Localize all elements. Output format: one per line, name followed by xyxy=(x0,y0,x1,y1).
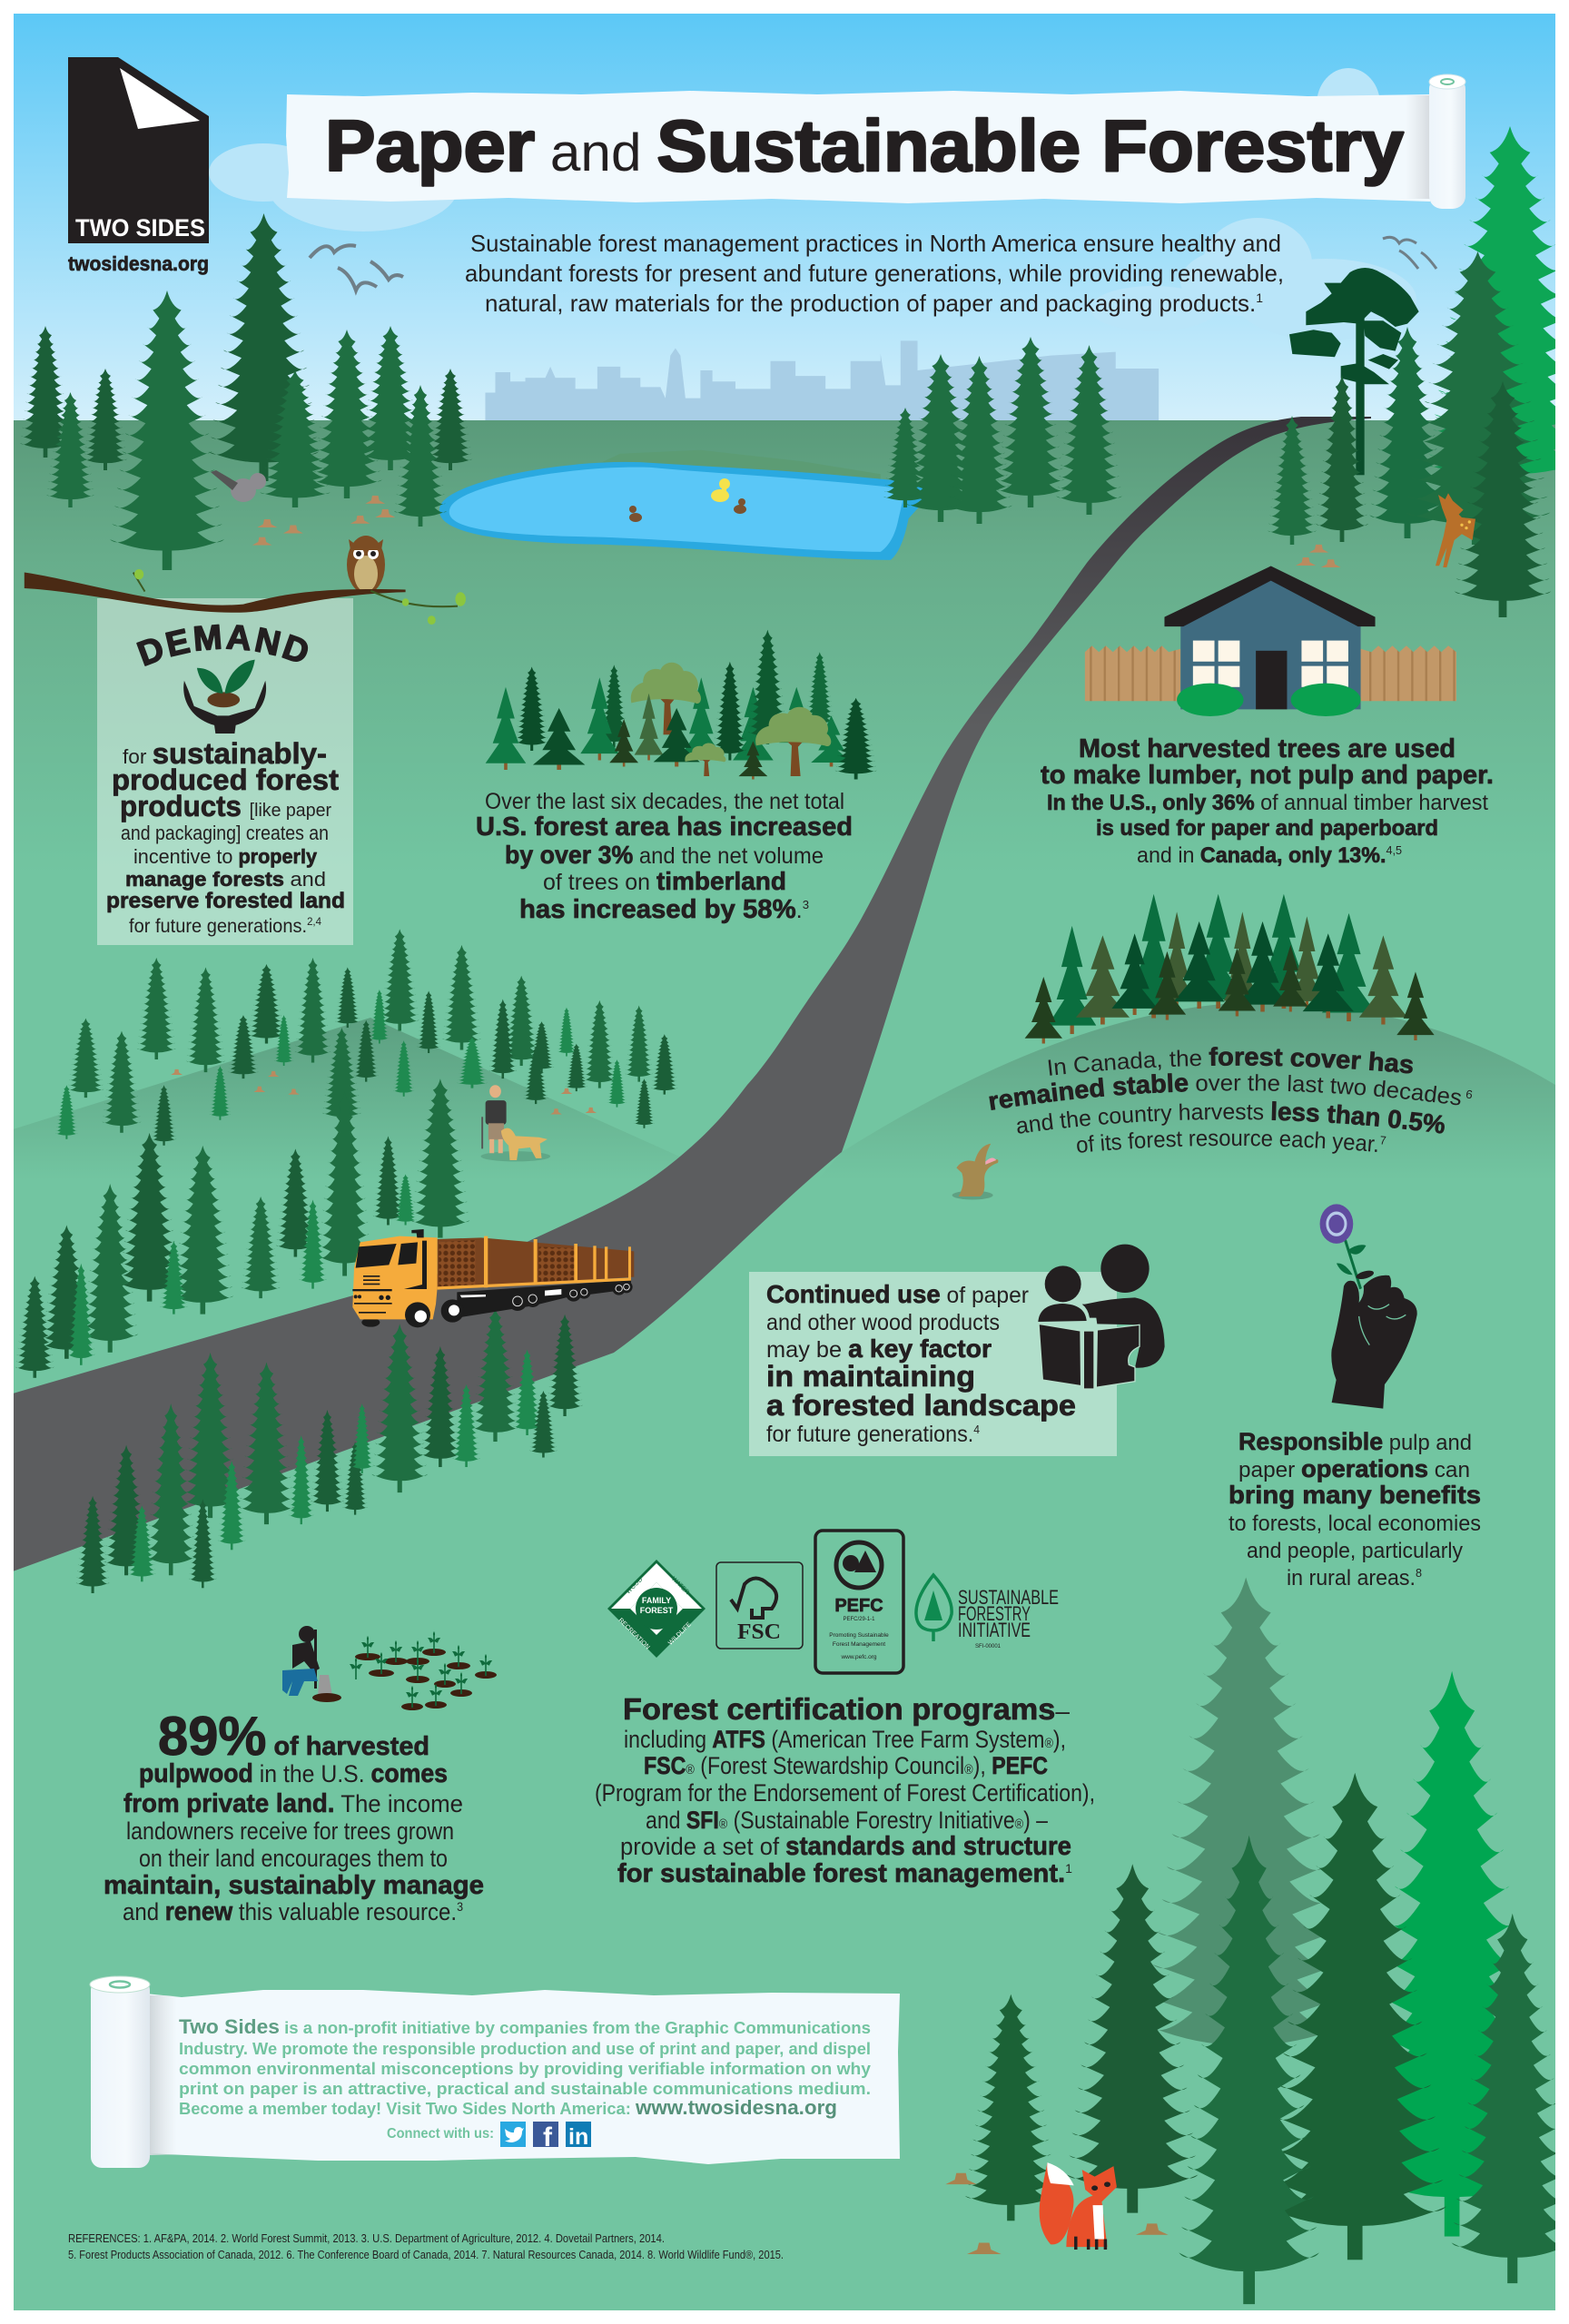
logo: FSC xyxy=(716,1562,803,1649)
curved text: Canada forest cover: In Canada, the forest cover has xyxy=(1048,1047,1413,1076)
text: about Two Sides: print on paper is an attractive, practical and sustainable communications medium. xyxy=(179,2080,871,2098)
text: responsible operations: in rural areas. xyxy=(1287,1566,1420,1590)
text: responsible operations: paper operations can xyxy=(1238,1455,1470,1482)
title: Paper and Sustainable Forestry xyxy=(325,105,1405,186)
text: forest area increase: Over the last six decades, the net total xyxy=(485,789,844,814)
text: forest area increase: 3 xyxy=(803,898,809,911)
curved text: Canada forest cover: of its forest resource each year. xyxy=(1077,1131,1377,1154)
text: responsible operations xyxy=(1229,1428,1481,1590)
icon: two people reading xyxy=(1038,1245,1165,1389)
logo: American Tree Farm System: FAMILY xyxy=(642,1596,671,1605)
text: about Two Sides: Industry. We promote the responsible production and use of print and paper, and dispel xyxy=(179,2040,871,2058)
text: forest certification programs: 1 xyxy=(1065,1861,1072,1876)
references: 5. Forest Products Association of Canada, 2012. 6. The Conference Board of Canada, 2014. 7. Natural Resources Canada, 2014. 8. World Wildlife Fund®, 2015. xyxy=(68,2249,784,2261)
bottom paper roll banner xyxy=(90,1976,900,2168)
demand text: preserve forested land xyxy=(106,889,345,913)
text: responsible operations: and people, particularly xyxy=(1247,1539,1463,1563)
logo: Two Sides: TWO SIDES xyxy=(75,214,205,241)
text: lumber use: 4,5 xyxy=(1386,843,1402,857)
logo: American Tree Farm System: WILDLIFE xyxy=(667,1621,693,1647)
social icons xyxy=(500,2122,591,2152)
logo: American Tree Farm System: RECREATION xyxy=(617,1617,651,1650)
intro text: 1 xyxy=(1256,290,1263,305)
logo: American Tree Farm System: FOREST xyxy=(640,1606,674,1615)
logo: Two Sides: twosidesna.org xyxy=(68,252,209,275)
forest: top right with pine xyxy=(1268,126,1569,617)
fox xyxy=(1040,2162,1117,2250)
demand text: manage forests and xyxy=(125,868,326,891)
logo: PEFC: www.pefc.org xyxy=(840,1654,877,1660)
text: forest certification programs: and SFI® (Sustainable Forestry Initiative®) – xyxy=(646,1807,1048,1834)
icon: linkedin: in xyxy=(568,2124,588,2150)
logo: Two Sides xyxy=(68,57,209,275)
text: 89% private land: maintain, sustainably manage xyxy=(104,1871,484,1900)
text: forest certification programs: provide a set of standards and structure xyxy=(620,1832,1071,1861)
demand arched heading: DEMAND xyxy=(136,625,309,666)
text: about Two Sides: Become a member today! Visit Two Sides North America: www.twosidesna.org xyxy=(179,2096,837,2119)
intro text: Sustainable forest management practices in North America ensure healthy and xyxy=(470,230,1281,257)
city skyline xyxy=(485,340,1159,420)
logo: FSC: FSC xyxy=(737,1620,781,1644)
logo: Sustainable Forestry Initiative: FORESTRY xyxy=(958,1602,1031,1625)
text: about Two Sides: common environmental misconceptions by providing verifiable information on why xyxy=(179,2060,871,2078)
curved text: Canada forest cover: remained stable over the last two decades xyxy=(989,1073,1461,1110)
icon: twitter xyxy=(500,2122,526,2147)
text: continued use: in maintaining xyxy=(766,1360,975,1393)
title banner with paper roll xyxy=(286,74,1465,209)
text: continued use xyxy=(766,1280,1076,1447)
illustration: mixed U.S. forest xyxy=(486,630,877,780)
text: 89% private land: from private land. The income xyxy=(123,1789,463,1818)
curved text: Canada forest cover xyxy=(989,1047,1473,1154)
text: lumber use: Most harvested trees are used xyxy=(1079,734,1456,763)
icon: hand holding flower xyxy=(1320,1204,1417,1409)
icon: person planting seedlings xyxy=(282,1626,497,1710)
truck with logs xyxy=(352,1229,634,1327)
logo: American Tree Farm System: WOOD xyxy=(625,1576,644,1595)
text: continued use: a forested landscape xyxy=(766,1389,1076,1422)
tree branch xyxy=(25,569,466,625)
text: lumber use: and in Canada, only 13%. xyxy=(1137,843,1392,868)
sky background xyxy=(14,14,1555,422)
logo: Sustainable Forestry Initiative: SFI-00001 xyxy=(975,1644,1002,1649)
certification logos xyxy=(607,1531,1059,1673)
text: forest certification programs: FSC® (Forest Stewardship Council®), PEFC xyxy=(644,1752,1048,1779)
text: 89% private land xyxy=(104,1706,484,1926)
text: forest area increase xyxy=(476,789,853,924)
text: forest area increase: U.S. forest area has increased xyxy=(476,812,853,842)
text: about Two Sides xyxy=(179,2015,871,2142)
intro text: abundant forests for present and future generations, while providing renewable, xyxy=(465,260,1284,287)
demand text: for sustainably- xyxy=(123,737,327,770)
text: 89% private land: and renew this valuable resource. xyxy=(123,1897,485,1926)
owl xyxy=(347,536,385,594)
logo: Sustainable Forestry Initiative xyxy=(916,1575,1059,1649)
text: forest certification programs: Forest certification programs – xyxy=(623,1692,1070,1726)
text: lumber use: In the U.S., only 36% of annual timber harvest xyxy=(1047,791,1488,815)
logo: PEFC xyxy=(815,1531,903,1673)
text: responsible operations: to forests, local economies xyxy=(1229,1512,1481,1536)
text: lumber use xyxy=(1041,734,1494,868)
text: lumber use: is used for paper and paperboard xyxy=(1096,816,1438,841)
text: forest certification programs xyxy=(595,1692,1095,1888)
text: forest certification programs: (Program for the Endorsement of Forest Certification), xyxy=(595,1779,1095,1807)
text: forest area increase: of trees on timberland xyxy=(543,867,786,895)
logo: PEFC: PEFC xyxy=(834,1596,883,1616)
demand text xyxy=(106,737,345,937)
text: continued use: for future generations. xyxy=(766,1422,989,1447)
text: responsible operations: Responsible pulp and xyxy=(1238,1428,1472,1455)
text: 89% private land: on their land encourages them to xyxy=(139,1845,448,1872)
text: 89% private land: pulpwood in the U.S. comes xyxy=(139,1759,448,1788)
hillside forest and lower forest xyxy=(15,929,678,1593)
text: forest area increase: has increased by 58%. xyxy=(519,895,803,924)
intro text: natural, raw materials for the production of paper and packaging products. xyxy=(485,290,1258,317)
text: continued use: 4 xyxy=(973,1423,980,1436)
continued use panel xyxy=(749,1272,1117,1456)
illustration: house and fence xyxy=(1085,566,1456,716)
curved text: Canada forest cover: 7 xyxy=(1380,1136,1386,1144)
ducks xyxy=(629,478,746,522)
logo: Sustainable Forestry Initiative: SUSTAINABLE xyxy=(958,1586,1059,1609)
demand text: 2,4 xyxy=(307,915,321,928)
logo: Sustainable Forestry Initiative: INITIATIVE xyxy=(958,1619,1031,1641)
text: forest certification programs: for sustainable forest management. xyxy=(617,1859,1065,1888)
hiker and dog xyxy=(481,1085,550,1161)
text: responsible operations: 8 xyxy=(1416,1566,1422,1580)
birds left xyxy=(310,245,403,290)
text: continued use: Continued use of paper xyxy=(766,1280,1029,1308)
tree stumps xyxy=(252,496,1341,567)
logo: American Tree Farm System xyxy=(607,1560,706,1658)
text: forest area increase: by over 3% and the net volume xyxy=(505,841,824,869)
text: about Two Sides: Connect with us: xyxy=(387,2126,494,2142)
intro text xyxy=(465,230,1284,317)
logo: PEFC: PEFC/29-1-1 xyxy=(843,1617,875,1622)
ground xyxy=(14,874,1555,2310)
logo: PEFC: Forest Management xyxy=(833,1641,885,1648)
demand text: produced forest xyxy=(112,763,339,796)
text: forest certification programs: including ATFS (American Tree Farm System®), xyxy=(624,1726,1066,1753)
text: responsible operations: bring many benefits xyxy=(1229,1481,1481,1509)
large foreground trees xyxy=(945,1577,1569,2304)
clouds xyxy=(209,68,1416,305)
demand text: for future generations. xyxy=(129,916,315,937)
icon: facebook: f xyxy=(543,2122,553,2152)
references xyxy=(68,2232,784,2261)
text: about Two Sides: Two Sides is a non-profit initiative by companies from the Graphic Communications xyxy=(179,2015,871,2038)
forest: top left xyxy=(20,213,472,570)
logo: American Tree Farm System: WATER xyxy=(670,1576,690,1596)
demand panel xyxy=(97,598,353,945)
logo: PEFC: Promoting Sustainable xyxy=(829,1632,889,1639)
demand text: products [like paper xyxy=(120,790,331,822)
demand text: incentive to properly xyxy=(133,845,318,868)
text: 89% private land: 3 xyxy=(457,1899,463,1914)
references: REFERENCES: 1. AF&PA, 2014. 2. World Forest Summit, 2013. 3. U.S. Department of Agriculture, 2012. 4. Dovetail Partners, 2014. xyxy=(68,2232,665,2245)
curved text: Canada forest cover: and the country harvests less than 0.5% xyxy=(1017,1101,1445,1134)
curved text: Canada forest cover: 6 xyxy=(1465,1089,1473,1098)
birds right xyxy=(1383,237,1436,269)
text: 89% private land: landowners receive for trees grown xyxy=(126,1817,454,1845)
illustration: Canadian forest on hill xyxy=(1025,894,1435,1044)
hill left xyxy=(14,1018,654,1146)
road xyxy=(13,417,1371,1571)
lake xyxy=(439,450,939,560)
hill right xyxy=(860,1004,1555,1142)
demand text: and packaging] creates an xyxy=(121,822,329,844)
raccoon xyxy=(211,470,266,502)
icon: hands holding plant xyxy=(183,660,266,734)
text: lumber use: to make lumber, not pulp and paper. xyxy=(1041,761,1494,790)
rabbit xyxy=(952,1144,998,1200)
text: continued use: may be a key factor xyxy=(766,1334,992,1363)
text: continued use: and other wood products xyxy=(766,1310,1000,1335)
deer xyxy=(1436,493,1475,567)
forest: behind lake xyxy=(883,337,1122,524)
text: 89% private land: 89% of harvested xyxy=(158,1706,429,1767)
